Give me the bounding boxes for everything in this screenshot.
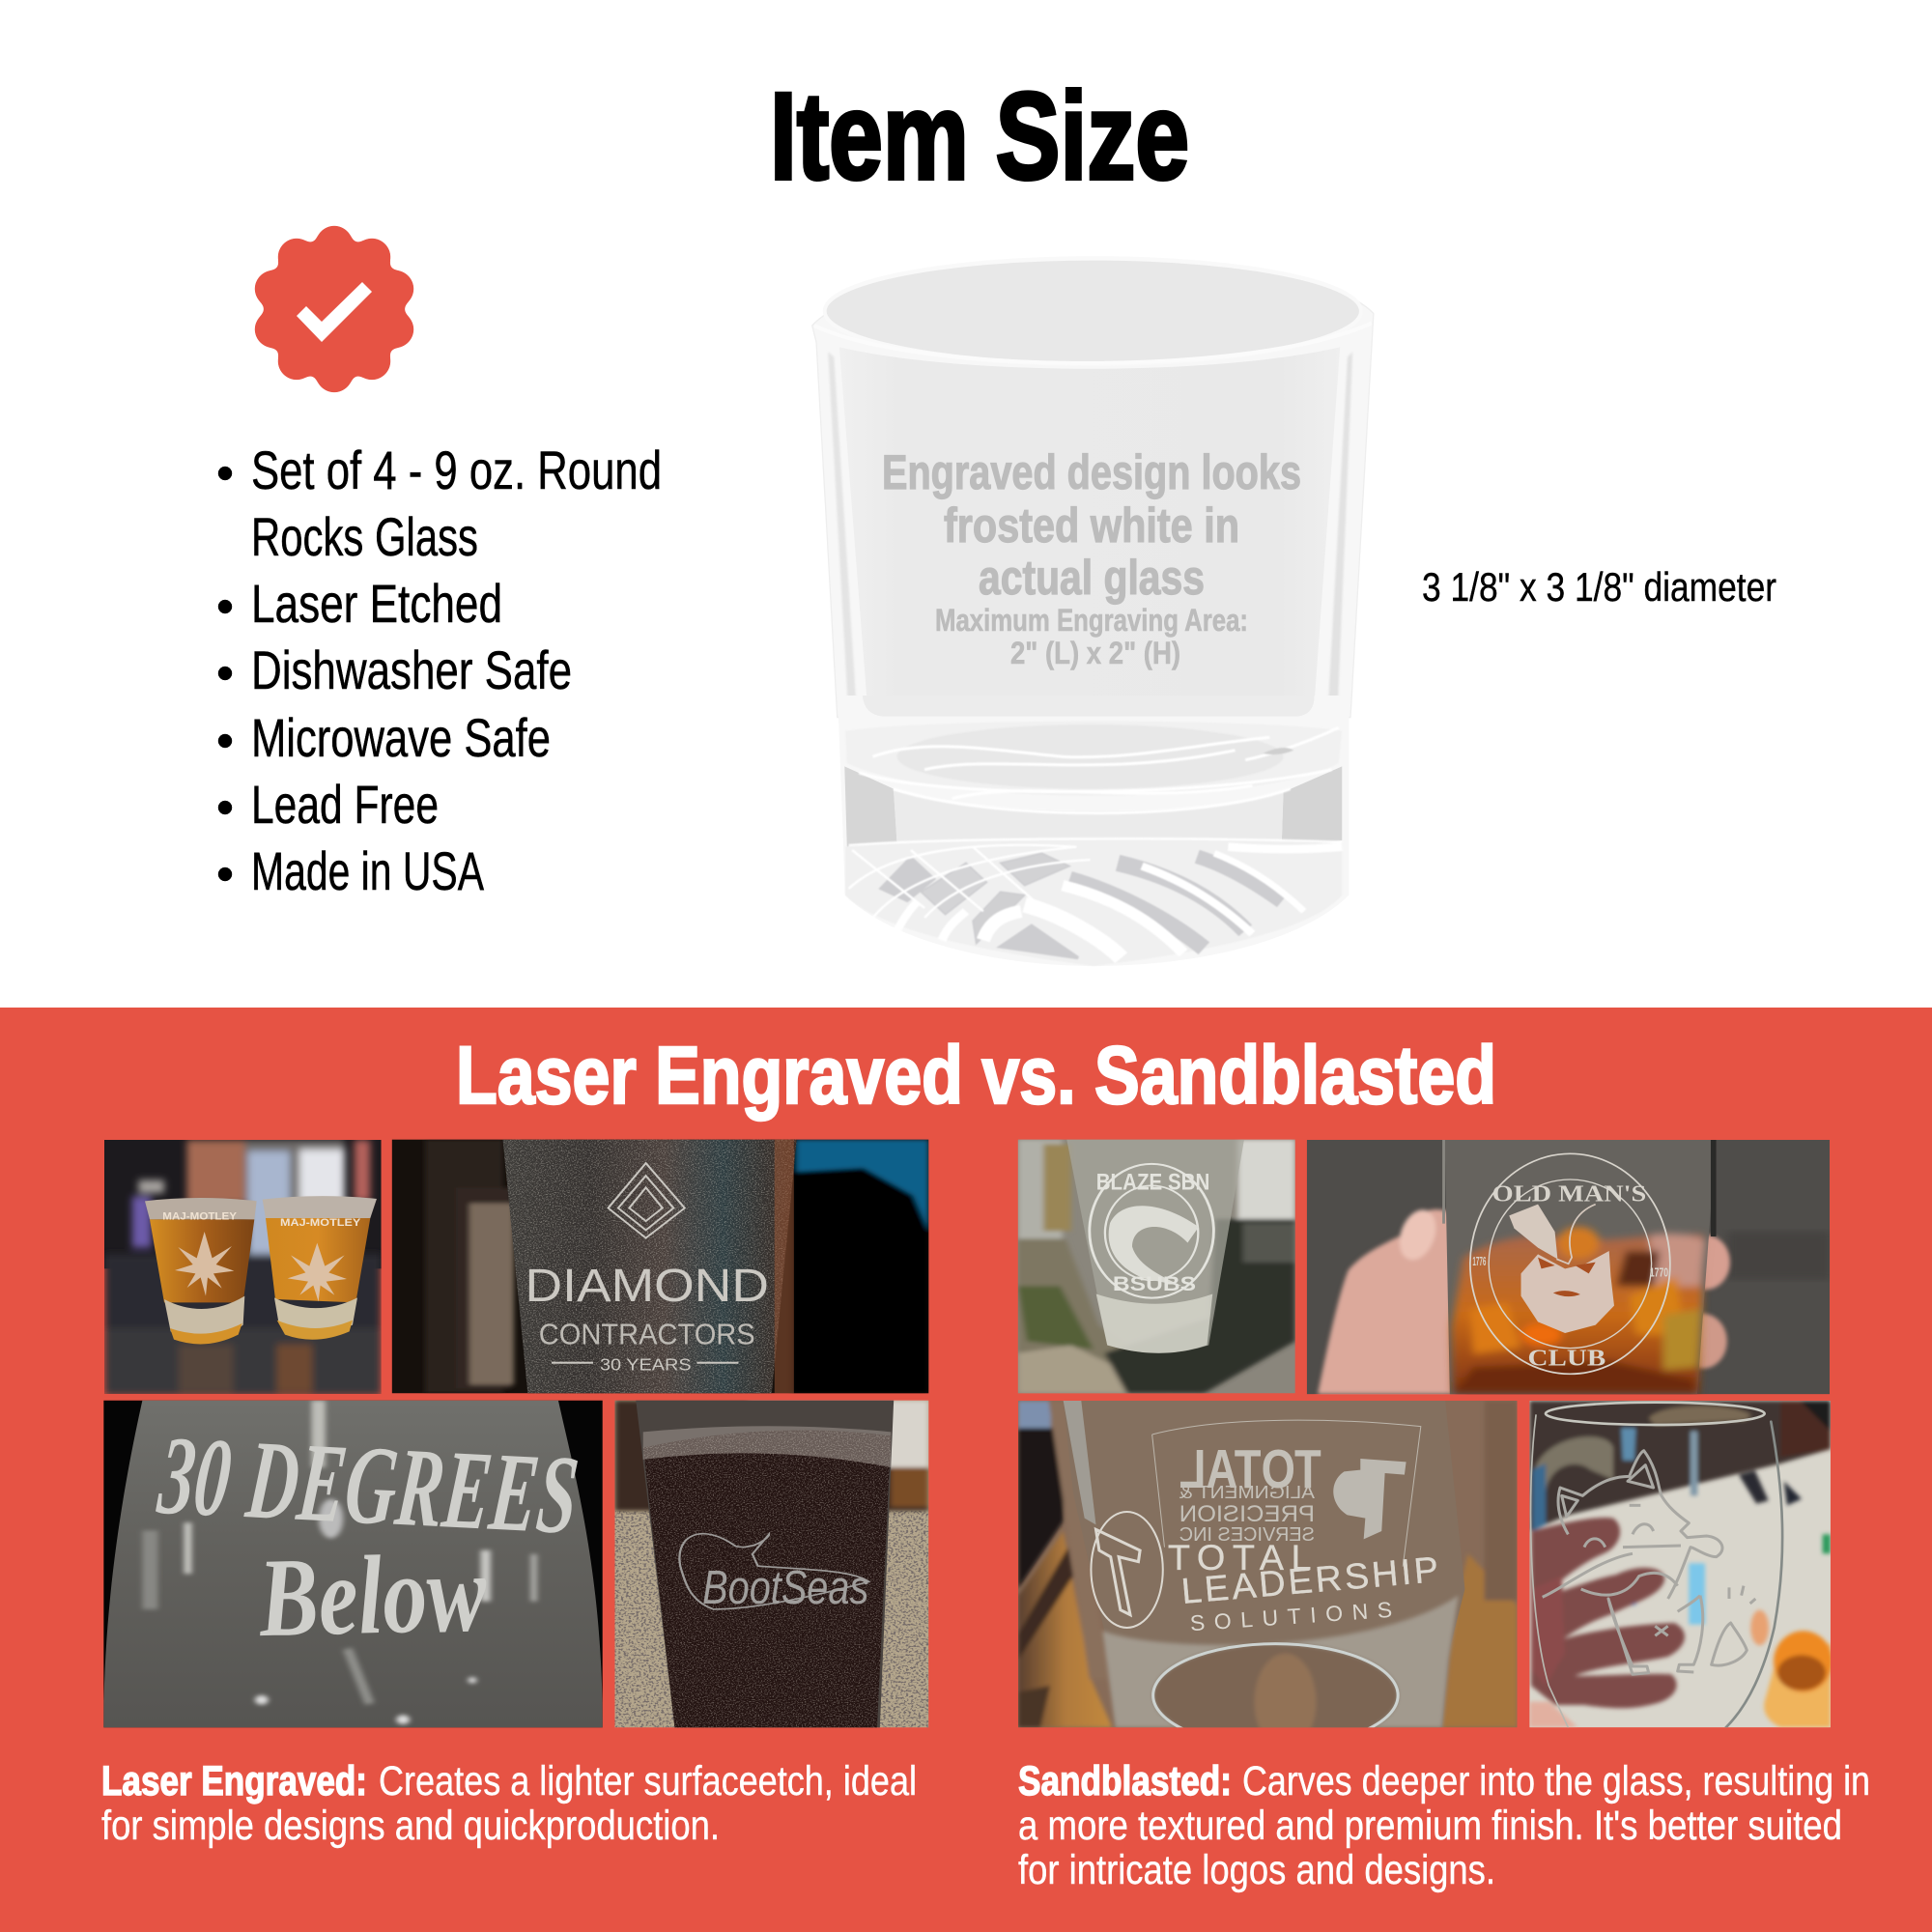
photo: cat wine glass — [1529, 1401, 1833, 1727]
feature list: Microwave Safe — [251, 707, 551, 768]
laser engraved photos — [103, 1140, 928, 1727]
dimensions label: 3 1/8" x 3 1/8" diameter — [1422, 564, 1776, 610]
glass upper body — [812, 265, 1374, 717]
feature list: Made in USA — [251, 840, 484, 901]
photo: Total Leadership glass: SERVICES INC — [1179, 1523, 1315, 1546]
photo: Blaze shot glass: BSUBS — [1113, 1273, 1196, 1295]
engraved note: 2" (L) x 2" (H) — [1010, 636, 1180, 670]
photo: Old Man's Club glass: OLD MAN'S — [1492, 1181, 1646, 1207]
photo: Total Leadership glass: ALIGNMENT & — [1179, 1482, 1315, 1502]
rim front highlight — [814, 324, 1372, 363]
base silhouette — [838, 696, 1349, 966]
engraved note: Maximum Engraving Area: — [935, 603, 1248, 638]
photo: Diamond Contractors pint: CONTRACTORS — [539, 1319, 755, 1351]
engraved note: actual glass — [979, 551, 1205, 605]
photo: Blaze shot glass: BLAZE SBN — [1096, 1170, 1209, 1195]
caption: laser engraved: for simple designs and quickproduction. — [101, 1803, 720, 1849]
cut bottom bands — [845, 838, 1342, 966]
laser engraved photos: 30 DEGREES — [153, 1412, 583, 1557]
photo: Old Man's Club glass: 1770 — [1650, 1265, 1668, 1280]
photo: Old Man's Club glass: CLUB — [1528, 1346, 1605, 1371]
rim opening — [825, 258, 1361, 364]
heading: Laser Engraved vs. Sandblasted — [456, 1030, 1496, 1121]
orange cup — [1764, 1644, 1831, 1727]
feature list: Set of 4 - 9 oz. Round — [251, 440, 662, 500]
photo: Old Man's Club glass: 1776 — [1472, 1254, 1487, 1268]
icon: check badge — [255, 226, 413, 392]
photo: cola glass BootSeas — [614, 1401, 928, 1727]
photo: Total Leadership glass — [1018, 1401, 1518, 1750]
glass base — [838, 696, 1349, 966]
feature list: Rocks Glass — [251, 506, 478, 567]
photo: Diamond Contractors pint: 30 YEARS — [600, 1356, 692, 1375]
caption: sandblasted: Sandblasted: — [1018, 1758, 1232, 1804]
photo: Total Leadership glass: SOLUTIONS — [1189, 1597, 1393, 1635]
photo: Total Leadership glass: PRECISION — [1179, 1501, 1315, 1527]
photo: 30 Degrees Below — [103, 1401, 603, 1727]
photo: 30 Degrees Below: Below — [255, 1530, 490, 1660]
swirl band — [845, 722, 1342, 813]
photo: Old Man's Club glass — [1307, 1140, 1830, 1394]
right shot glass — [263, 1196, 377, 1340]
photo: Blaze shot glass — [1018, 1140, 1295, 1393]
cat outline — [1543, 1451, 1755, 1674]
feature list: Laser Etched — [251, 573, 502, 634]
right shot glass: MAJ-MOTLEY — [280, 1217, 361, 1229]
engraved note — [882, 445, 1301, 670]
sandblasted photos — [1018, 1140, 1833, 1750]
caption: sandblasted — [1018, 1758, 1870, 1893]
caption: laser engraved: Creates a lighter surfaceetch, ideal — [379, 1758, 917, 1804]
hand — [1531, 1518, 1685, 1708]
pale centre — [894, 790, 1284, 843]
title: Item Size: Item Size — [770, 68, 1189, 206]
interior bottom edge — [863, 696, 1315, 717]
panel: Laser Engraved vs. Sandblasted — [0, 1008, 1932, 1932]
grey side blocks — [844, 766, 897, 847]
caption: laser engraved: Laser Engraved: — [101, 1758, 367, 1804]
glass illustration — [812, 258, 1374, 966]
left shot glass: MAJ-MOTLEY — [162, 1210, 237, 1222]
feature list: Dishwasher Safe — [251, 639, 572, 700]
photo: Total Leadership glass: TOTAL — [1168, 1537, 1312, 1577]
engraved note: Engraved design looks — [882, 445, 1301, 499]
caption: sandblasted: for intricate logos and designs. — [1018, 1847, 1495, 1893]
photo: Diamond Contractors pint — [392, 1140, 928, 1393]
photo: Total Leadership glass: LEADERSHIP — [1179, 1548, 1440, 1611]
side reflections — [828, 352, 1352, 703]
photo: shot glasses — [104, 1140, 382, 1396]
engraved note: frosted white in — [944, 498, 1239, 553]
panel background — [0, 1008, 1932, 1932]
caption: laser engraved — [101, 1758, 917, 1849]
photo: cola glass BootSeas: BootSeas — [702, 1561, 868, 1613]
inner wall — [839, 347, 1340, 715]
feature list: Lead Free — [251, 774, 439, 835]
photo: Diamond Contractors pint: DIAMOND — [525, 1260, 769, 1312]
left shot glass — [145, 1198, 257, 1344]
photo: Total Leadership glass: TOTAL — [1179, 1438, 1321, 1500]
feature list — [218, 440, 662, 901]
